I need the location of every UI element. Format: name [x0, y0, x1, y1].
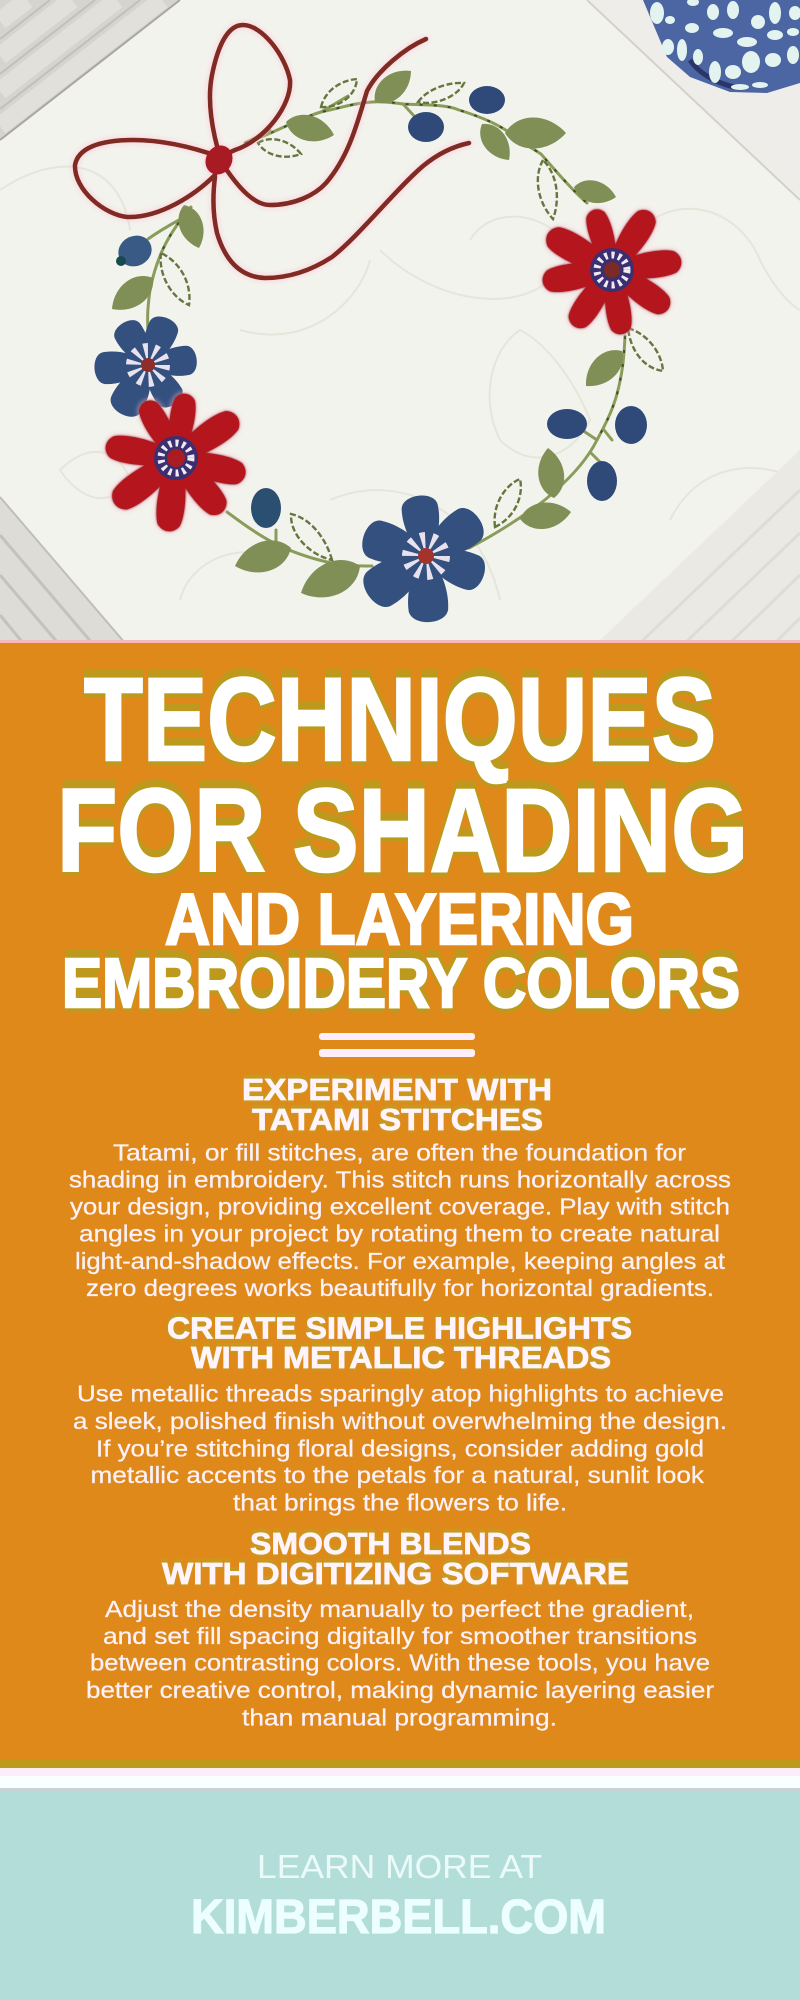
title: [57, 654, 748, 1022]
white divider band: [0, 1768, 800, 1792]
heading: digitizing software: WITH DIGITIZING SOFTWARE: [162, 1556, 629, 1591]
text: learn more at: LEARN MORE AT: [257, 1848, 542, 1885]
heading: tatami stitches: [242, 1072, 552, 1137]
heading: digitizing software: [162, 1526, 629, 1591]
outline leaves: [161, 79, 663, 560]
blue flower bottom: [357, 493, 490, 623]
section: metallic threads: [73, 1310, 727, 1516]
title: AND LAYERING: [165, 880, 634, 960]
divider double line: [319, 1033, 475, 1057]
text: metallic threads: metallic accents to the petals for a natural, sunlit look: [90, 1462, 705, 1488]
panel: orange content: [0, 640, 800, 1768]
text: metallic threads: Use metallic threads sparingly atop highlights to achieve: [77, 1381, 724, 1407]
text: website: KIMBERBELL.COM: [191, 1891, 606, 1944]
text: tatami stitches: angles in your project by rotating them to create natural: [79, 1221, 720, 1247]
red flower left: [104, 392, 248, 533]
rope: bottom-right: [597, 450, 800, 643]
red flower right: [541, 205, 683, 336]
section: digitizing software: [86, 1526, 714, 1731]
text: tatami stitches: light-and-shadow effects. For example, keeping angles at: [75, 1248, 726, 1274]
section: tatami stitches: [69, 1072, 731, 1301]
text: metallic threads: If you’re stitching floral designs, consider adding gold: [96, 1436, 704, 1462]
text: digitizing software: better creative control, making dynamic layering easier: [86, 1677, 714, 1703]
rope: top-right: [587, 0, 800, 200]
text: tatami stitches: your design, providing excellent coverage. Play with stitch: [70, 1194, 730, 1220]
text: tatami stitches: shading in embroidery. This stitch runs horizontally across: [69, 1167, 731, 1193]
text: digitizing software: [86, 1596, 714, 1731]
heading: metallic threads: WITH METALLIC THREADS: [191, 1340, 611, 1375]
berries: [113, 86, 647, 528]
text: digitizing software: between contrasting colors. With these tools, you have: [90, 1650, 710, 1676]
text: digitizing software: than manual programming.: [242, 1705, 557, 1731]
blue flower left: [93, 312, 198, 422]
text: tatami stitches: Tatami, or fill stitches, are often the foundation for: [113, 1140, 686, 1166]
text: digitizing software: and set fill spacing digitally for smoother transitions: [103, 1623, 697, 1649]
heading: metallic threads: CREATE SIMPLE HIGHLIGHTS: [167, 1310, 632, 1346]
rope: top-left: [0, 0, 180, 140]
blue patterned fabric: [643, 0, 800, 93]
panel: call to action: [0, 1792, 800, 2000]
text: metallic threads: [73, 1381, 727, 1516]
wreath stems: [148, 96, 625, 566]
text: metallic threads: a sleek, polished finish without overwhelming the design.: [73, 1408, 727, 1434]
rope: bottom-left: [0, 497, 125, 643]
text: metallic threads: that brings the flowers to life.: [233, 1490, 567, 1516]
text: digitizing software: Adjust the density manually to perfect the gradient,: [105, 1596, 694, 1622]
heading: digitizing software: SMOOTH BLENDS: [250, 1526, 531, 1561]
heading: metallic threads: [167, 1310, 632, 1375]
red thread bow: [75, 25, 469, 278]
heading: tatami stitches: TATAMI STITCHES: [252, 1102, 543, 1137]
text: tatami stitches: [69, 1140, 731, 1301]
quilting pattern lines: [0, 167, 800, 600]
green leaves: [104, 62, 631, 608]
heading: tatami stitches: EXPERIMENT WITH: [242, 1072, 552, 1107]
text: tatami stitches: zero degrees works beautifully for horizontal gradients.: [86, 1275, 714, 1301]
panel: embroidery photo: [0, 0, 800, 643]
